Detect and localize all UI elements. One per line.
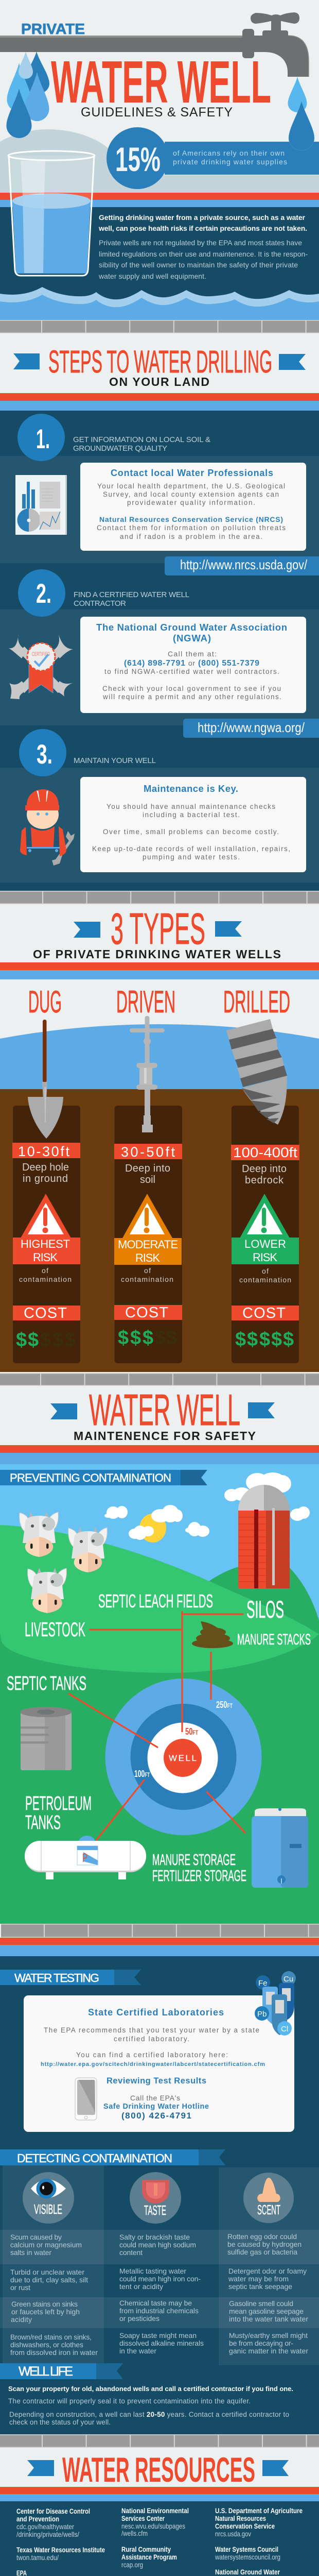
column text: visible: or rust	[10, 2283, 30, 2292]
column one resources: cdc.gov/healthywater	[16, 2522, 74, 2531]
waves	[0, 287, 319, 328]
column two resources: /wells.cfm	[121, 2529, 148, 2537]
description: Deep into	[242, 1163, 287, 1175]
icon: septic tank	[20, 1707, 72, 1770]
icon: right drops	[288, 77, 307, 112]
label: petroleum tanks: PETROLEUM	[25, 1793, 92, 1815]
card: maintenance is key: pumping and water tests.	[143, 853, 240, 861]
description: Deep into	[125, 1163, 170, 1174]
description	[242, 1163, 287, 1186]
icon: test tubes	[255, 1971, 296, 2036]
cost dollars: $	[130, 1327, 141, 1349]
panel: water testing	[0, 1970, 296, 2132]
callout: 15 percent band: of Americans rely on their own	[173, 149, 285, 157]
ribbon right	[248, 1402, 275, 1418]
cost label: COST	[242, 1305, 286, 1321]
cost dollars: $	[52, 1329, 63, 1351]
column one resources: /drinking/private/wells/	[16, 2530, 79, 2538]
sky	[0, 1464, 319, 1670]
warning sign	[21, 1194, 71, 1238]
column two resources: Assistance Program	[121, 2553, 177, 2561]
column text: visible: Brown/red stains on sinks,	[10, 2333, 92, 2341]
description: Deep hole	[22, 1162, 69, 1173]
column backgrounds	[13, 1106, 299, 1363]
icon: storage tank	[252, 1808, 308, 1888]
label: silos: SILOS	[246, 1596, 284, 1623]
icon: falling drop	[289, 101, 314, 150]
column three resources: Conservation Service	[215, 2522, 275, 2530]
section: 3 types heading	[0, 891, 319, 979]
label: septic tanks: SEPTIC TANKS	[7, 1673, 86, 1694]
icon: taste tongue	[130, 2172, 181, 2224]
contamination note: contamination	[239, 1276, 291, 1284]
card: contact local water professionals: Contact them for information on pollution threats	[97, 524, 286, 532]
column text: visible: due to dirt, clay salts, silt	[10, 2276, 88, 2284]
ribbon left	[74, 922, 100, 938]
card: contact local water professionals	[80, 463, 306, 551]
column text: scent: ganic matter in the water	[229, 2347, 308, 2355]
column three resources: watersystemscouncil.org	[215, 2553, 280, 2561]
well life text: Depending on construction, a well can last 20-50 years. Contact a certified contractor to	[9, 2411, 289, 2418]
column text: visible: Turbid or unclear water	[10, 2268, 84, 2276]
column one resources: and Prevention	[16, 2515, 59, 2523]
step 1 label: GROUNDWATER QUALITY	[73, 444, 167, 453]
cost dollars: $	[271, 1329, 282, 1350]
column text: visible: dishwashers, or clothes	[10, 2341, 83, 2349]
ribbon left	[50, 1403, 77, 1419]
cost label	[13, 1305, 80, 1321]
column text: taste: from industrial chemicals	[119, 2307, 199, 2315]
icon: visible eye	[23, 2172, 74, 2224]
intro text	[98, 213, 308, 280]
column two resources: Rural Community	[121, 2545, 171, 2553]
callout: 15 percent band	[107, 127, 319, 189]
cost dollars: $	[259, 1329, 270, 1350]
column text: scent: septic tank seepage	[228, 2282, 292, 2291]
depth label: 10-30ft	[18, 1144, 69, 1159]
column text: visible: Scum caused by	[10, 2233, 62, 2241]
well names: DRIVEN	[116, 985, 175, 1019]
intro text: sibility of the well owner to maintain the safety of their private	[99, 261, 298, 269]
card: certified laboratories: You can find a certified laboratory here:	[76, 2051, 228, 2059]
distance target rings	[105, 1679, 261, 1835]
description: soil	[140, 1174, 155, 1185]
column text: visible	[10, 2233, 98, 2357]
column text: taste: Salty or brackish taste	[119, 2233, 190, 2241]
column three resources: nrcs.usda.gov	[215, 2530, 251, 2538]
description: bedrock	[245, 1175, 284, 1186]
column text: visible: calcium or magnesium	[10, 2241, 82, 2249]
icon: cow three	[28, 1568, 66, 1613]
column three resources: National Ground Water	[215, 2568, 280, 2576]
stripes under hill	[0, 193, 319, 320]
icon: scent nose	[243, 2173, 294, 2223]
intro text: well, can pose health risks if certain precautions are not taken.	[98, 224, 307, 232]
ribbon right	[262, 2460, 289, 2476]
step 3 label: MAINTAIN YOUR WELL	[74, 756, 156, 765]
label: septic leach fields: SEPTIC LEACH FIELDS	[98, 1590, 213, 1612]
description	[22, 1162, 69, 1184]
column text: scent	[227, 2232, 308, 2355]
column text: visible: salts in water	[10, 2248, 51, 2257]
icon: test tubes: Pb	[257, 2010, 267, 2019]
banner: water testing: WATER TESTING	[14, 1971, 99, 1985]
cost dollars: $	[155, 1327, 166, 1349]
cost dollars	[235, 1329, 294, 1350]
card: maintenance is key: Keep up-to-date records of well installation, repairs,	[92, 845, 290, 853]
panel: well types	[0, 985, 319, 1372]
callout: 15 percent band: private drinking water supplies	[173, 158, 287, 166]
header panel	[0, 12, 319, 328]
column two resources	[121, 2506, 189, 2576]
step 2 label: CONTRACTOR	[74, 599, 126, 608]
step 3 number	[19, 729, 66, 776]
column text: scent: be from decaying or-	[229, 2339, 293, 2347]
intro text: Private wells are not regulated by the EPA and most states have	[99, 239, 302, 247]
card: national ground water association: (614) 898-7791 or (800) 551-7379	[124, 659, 259, 668]
column text: scent: Gasoline smell could	[229, 2299, 293, 2308]
icon: glass of water	[8, 151, 95, 276]
column text: taste: Chemical taste may be	[119, 2299, 192, 2307]
column one resources	[16, 2507, 105, 2576]
band: bricks above testing	[0, 1924, 319, 2434]
step 1 label: GET INFORMATION ON LOCAL SOIL &	[73, 435, 210, 444]
step 2 label: FIND A CERTIFIED WATER WELL	[74, 590, 189, 599]
risk label: RISK	[135, 1251, 160, 1264]
column one resources: Center for Disease Control	[16, 2507, 90, 2515]
connector lines	[68, 1611, 245, 1840]
warning sign	[240, 1194, 290, 1238]
icon: visible eye: VISIBLE	[34, 2201, 62, 2217]
card: national ground water association: Call them at:	[168, 650, 217, 658]
card: maintenance is key: You should have annual maintenance checks	[107, 803, 275, 810]
well life text: Scan your property for old, abandoned wells and call a certified contractor if you find one.	[8, 2385, 293, 2393]
card: certified laboratories: State Certified Laboratories	[88, 2007, 224, 2018]
icon: silo	[238, 1485, 290, 1588]
subheading: MAINTENENCE FOR SAFETY	[74, 1429, 256, 1443]
card: national ground water association	[80, 617, 306, 713]
card: contact local water professionals: Your local health department, the U.S. Geological	[97, 482, 285, 490]
column text: taste: dissolved alkaline minerals	[119, 2339, 204, 2347]
cost dollars: $	[247, 1329, 258, 1350]
banner: well life: WELL LIFE	[19, 2364, 73, 2379]
cost dollars: $	[40, 1329, 51, 1351]
ribbon left	[27, 2460, 54, 2476]
well names	[28, 985, 290, 1019]
risk label: MODERATE	[118, 1238, 178, 1251]
icon: certified badge and wrenches: CERTIFIED	[32, 651, 50, 657]
column: dug	[12, 1143, 80, 1351]
panel: preventing contamination	[0, 1464, 319, 1924]
risk label: RISK	[253, 1251, 277, 1264]
column text: scent: into the water tank water	[229, 2315, 308, 2323]
card: national ground water association: (NGWA)	[173, 633, 211, 643]
banner: detecting contamination: DETECTING CONTAMINATION	[17, 2151, 172, 2165]
column text: scent: sulfide gas or bacteria	[227, 2248, 297, 2256]
panel: detecting contamination	[0, 2149, 319, 2365]
ground	[0, 1089, 319, 1372]
callout: 15 percent band: 15%	[115, 140, 161, 178]
card: maintenance is key: Maintenance is Key.	[144, 783, 238, 794]
card: certified laboratories	[24, 1995, 294, 2132]
risk label	[13, 1238, 80, 1264]
card: certified laboratories: (800) 426-4791	[121, 2111, 191, 2121]
clouds	[104, 1472, 310, 1521]
table backgrounds	[0, 2165, 319, 2365]
column text: scent: water may be from	[228, 2275, 289, 2283]
step 1 label	[73, 435, 210, 453]
banner: water testing	[0, 1970, 141, 1985]
icon: petroleum tank: P	[82, 1851, 87, 1865]
step 1 number	[17, 414, 65, 461]
card: national ground water association: The National Ground Water Association	[96, 622, 287, 633]
cost dollars: $	[118, 1327, 129, 1349]
icon: test tubes: Cu	[283, 1975, 293, 1984]
banner: preventing contamination: PREVENTING CONTAMINATION	[10, 1471, 171, 1484]
intro text: limited regulations on their use and maintenence. It is the respon-	[99, 250, 308, 258]
contamination note	[121, 1266, 173, 1283]
card: certified laboratories: certified laboratory.	[114, 2035, 189, 2043]
column two resources: rcap.org	[121, 2561, 143, 2569]
column text: taste: or pesticides	[119, 2314, 160, 2323]
icon: report document	[15, 475, 67, 535]
icon: faucet and pipe	[0, 12, 309, 77]
icon: cow two	[68, 1527, 107, 1572]
subtitle: GUIDELINES & SAFETY	[81, 105, 233, 120]
contamination note: of	[42, 1266, 48, 1275]
clouds near sun	[129, 1505, 209, 1540]
back hill	[198, 1563, 319, 1700]
column text: taste: could mean high sodium	[119, 2241, 196, 2249]
column two resources: National Environmental	[121, 2506, 189, 2515]
card: contact local water professionals: providewater quality information.	[127, 499, 255, 506]
hill backdrop	[0, 129, 319, 193]
banner: detecting contamination	[0, 2149, 225, 2165]
panel: resources list	[16, 2506, 303, 2576]
panel: well life	[0, 2363, 293, 2426]
icon: certified badge and wrenches	[9, 634, 74, 699]
risk label	[232, 1238, 299, 1264]
column text: taste: tent or acidity	[119, 2282, 163, 2291]
column text: scent: Musty/earthy smell might	[229, 2331, 308, 2340]
cost dollars: $	[235, 1329, 246, 1350]
label: petroleum tanks	[25, 1793, 92, 1834]
risk label: LOWER	[244, 1238, 286, 1250]
banner: well life	[0, 2363, 123, 2379]
base field	[0, 1633, 319, 1924]
intro text: water supply and well equipment.	[98, 272, 206, 280]
label: petroleum tanks: TANKS	[25, 1812, 61, 1834]
column three resources	[215, 2506, 303, 2576]
contamination note: of	[262, 1267, 269, 1275]
front hill	[0, 1525, 319, 1673]
card: certified laboratories: Reviewing Test Results	[107, 2076, 206, 2086]
column text: taste: could mean high iron con-	[119, 2275, 201, 2283]
icon: smartphone	[75, 2078, 97, 2120]
contamination note: contamination	[121, 1275, 173, 1283]
section: maintenance heading	[0, 1372, 319, 1464]
depth label: 100-400ft	[233, 1145, 298, 1160]
label: manure and fertilizer storage: MANURE STORAGE	[152, 1851, 236, 1869]
ribbon left	[13, 353, 40, 369]
section: water resources heading	[0, 2434, 319, 2576]
well life text: The contractor will properly seal it to prevent contamination into the aquifer.	[8, 2397, 251, 2405]
column text: visible: acidity	[11, 2315, 32, 2324]
card: national ground water association: to find NGWA-certified water well contractors.	[104, 668, 279, 675]
label: private: PRIVATE	[21, 21, 85, 38]
card: certified laboratories: The EPA recommends that you test your water by a state	[44, 2026, 259, 2034]
distance labels: 250FT	[216, 1700, 233, 1710]
column text: visible: Green stains on sinks	[11, 2300, 78, 2308]
icon: petroleum tank	[25, 1836, 146, 1879]
card: contact local water professionals: Contact local Water Professionals	[111, 468, 273, 478]
column text: taste: in the water	[119, 2347, 156, 2355]
step 2 label	[74, 590, 189, 608]
warning sign	[122, 1194, 172, 1238]
card: maintenance is key: Over time, small problems can become costly.	[103, 828, 279, 836]
card: contact local water professionals: Natural Resources Conservation Service (NRCS)	[99, 515, 283, 523]
risk label	[114, 1238, 182, 1265]
well names: DUG	[28, 985, 62, 1019]
cost dollars	[118, 1327, 177, 1349]
icon: shovel	[28, 1020, 63, 1139]
cost label	[114, 1304, 182, 1321]
risk label: RISK	[33, 1251, 58, 1264]
label: livestock: LIVESTOCK	[25, 1619, 85, 1641]
cost dollars: $	[283, 1329, 294, 1350]
contamination note: contamination	[19, 1275, 72, 1283]
cost dollars	[16, 1329, 76, 1351]
description	[125, 1163, 170, 1185]
distance labels: 50FT	[185, 1726, 198, 1737]
distance labels	[134, 1700, 233, 1779]
icon: water drops cluster	[6, 52, 49, 138]
column three resources: U.S. Department of Agriculture	[215, 2506, 303, 2515]
column text: visible: from dissolved iron in water	[10, 2348, 98, 2357]
intro text: Getting drinking water from a private source, such as a water	[99, 213, 306, 222]
icon: scent nose: SCENT	[257, 2202, 280, 2217]
description: in ground	[23, 1173, 68, 1184]
contamination note	[19, 1266, 72, 1283]
icon: worker with wrench	[20, 789, 75, 866]
distance target rings: WELL	[169, 1753, 197, 1763]
well life text: check on the status of your well.	[9, 2418, 111, 2426]
cost label: COST	[125, 1304, 168, 1321]
card: contact local water professionals: Survey, and local county extension agents can	[103, 490, 279, 498]
url tab: ngwa: http://www.ngwa.org/	[198, 720, 305, 735]
icon: test tubes: Cl	[281, 2025, 288, 2033]
banner: preventing contamination	[0, 1470, 207, 1485]
column text: visible: or faucets left by high	[11, 2308, 80, 2316]
card: certified laboratories: Call the EPA's	[130, 2094, 180, 2102]
card: national ground water association: will require a permit and any other regulations.	[102, 693, 281, 701]
column two resources: nesc.wvu.edu/subpages	[121, 2522, 185, 2530]
column three resources: Natural Resources	[215, 2514, 266, 2522]
contamination note	[239, 1267, 291, 1284]
icon: driven well point	[130, 1016, 165, 1132]
contamination note: of	[144, 1266, 151, 1275]
ribbon right	[215, 921, 242, 937]
step 1 number: 1.	[36, 424, 50, 454]
panel: steps	[0, 411, 319, 891]
cost label: COST	[24, 1305, 67, 1321]
icon: test tubes: Fe	[258, 1979, 268, 1988]
cost dollars: $	[166, 1327, 177, 1349]
column text: scent: mean gasoline seepage	[229, 2307, 304, 2315]
risk label: HIGHEST	[21, 1238, 70, 1250]
column text: taste	[119, 2233, 204, 2355]
depth label: 30-50ft	[121, 1144, 175, 1160]
section: steps heading	[0, 320, 319, 411]
cost dollars: $	[28, 1329, 39, 1351]
icon: sun	[139, 1514, 166, 1543]
card: certified laboratories: Safe Drinking Water Hotline	[103, 2103, 209, 2111]
column one resources: Texas Water Resources Institute	[16, 2546, 105, 2554]
heading: 3 types: 3 TYPES	[111, 905, 205, 954]
ribbon right	[279, 354, 306, 370]
distance labels: 100FT	[134, 1769, 150, 1779]
column three resources: Water Systems Council	[215, 2545, 278, 2553]
subheading: ON YOUR LAND	[109, 375, 209, 388]
card: certified laboratories: http://water.epa.gov/scitech/drinkingwater/labcert/statecertification.cfm	[41, 2061, 265, 2067]
icon: cow one	[20, 1512, 58, 1557]
column one resources: twon.tamu.edu/	[16, 2553, 59, 2562]
column: drilled	[231, 1145, 299, 1350]
icon: taste tongue: TASTE	[144, 2202, 166, 2218]
step 3 number: 3.	[37, 739, 52, 770]
cost dollars: $	[143, 1327, 153, 1349]
step 2 number	[18, 569, 65, 617]
cost dollars: $	[16, 1329, 27, 1351]
column text: scent: Detergent odor or foamy	[228, 2267, 307, 2275]
column text: taste: Metallic tasting water	[119, 2267, 186, 2275]
well life text	[8, 2385, 293, 2426]
sky dome	[0, 1024, 319, 1089]
step 2 number: 2.	[36, 579, 51, 609]
cost dollars: $	[65, 1329, 76, 1351]
card: maintenance is key: including a bacterial test.	[143, 811, 240, 819]
icon: manure pile	[192, 1621, 233, 1648]
column text: taste: Soapy taste might mean	[119, 2331, 197, 2340]
subheading: OF PRIVATE DRINKING WATER WELLS	[33, 947, 281, 961]
card: maintenance is key	[80, 777, 306, 872]
label: manure and fertilizer storage	[152, 1851, 246, 1885]
column: driven	[114, 1144, 182, 1349]
card: national ground water association: Check with your local government to see if you	[102, 685, 281, 692]
cost label	[232, 1305, 299, 1321]
column text: scent: be caused by hydrogen	[227, 2240, 302, 2248]
column text: scent: Rotten egg odor could	[227, 2232, 297, 2241]
column text: taste: content	[119, 2248, 143, 2257]
icon: drill bit	[226, 1019, 287, 1125]
card: contact local water professionals: and if radon is a problem in the area.	[120, 533, 262, 540]
column two resources: Services Center	[121, 2514, 165, 2522]
